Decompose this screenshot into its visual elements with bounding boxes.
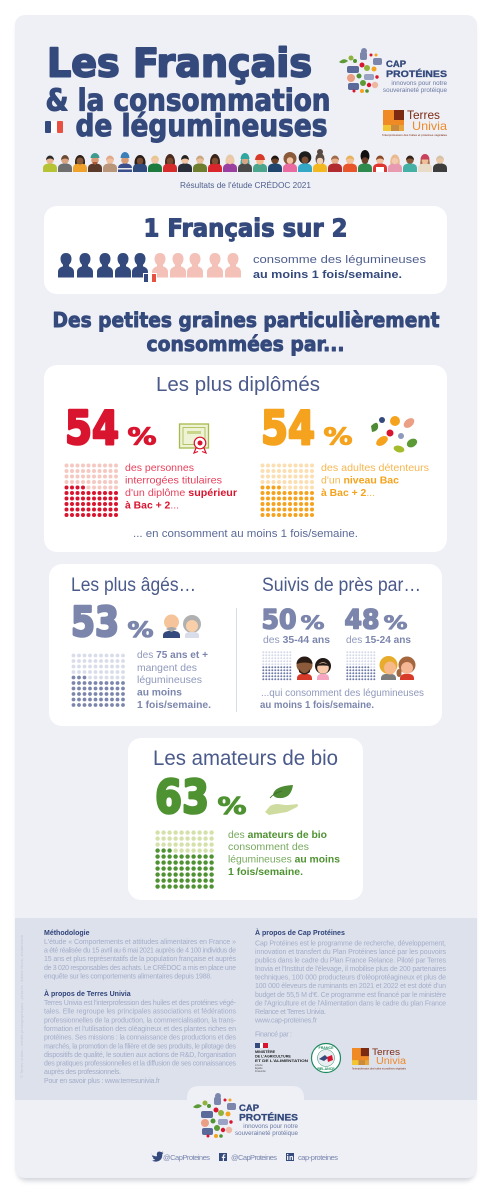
logo: ministère: Fraternité [255, 1070, 266, 1073]
text: 75 ans et +: des 75 ans et + [137, 649, 208, 661]
stat: 48%: 48 [344, 604, 380, 636]
text: 75 ans et + [137, 649, 211, 711]
stat: 54% orange: % [324, 424, 352, 450]
icon: LinkedIn [286, 1153, 294, 1161]
stat: 63%: % [218, 794, 246, 820]
logo: ministère [255, 1043, 308, 1073]
text: 75 ans et +: mangent des [137, 662, 197, 674]
footer tab [187, 1086, 304, 1100]
logo: Cap Protéines footer [193, 1093, 299, 1138]
text: À propos de Terres Univia: formation et l'utilisation des oléagineux et des plantes riches en [44, 1026, 236, 1033]
stat: 50%: % [300, 612, 324, 634]
icon: French flag [45, 121, 63, 133]
logo: Cap Protéines: PROTÉINES [386, 69, 447, 80]
text: À propos de Terres Univia: professionnelles de la production, la commercialisation, la trans- [44, 1017, 237, 1024]
heading: Des petites graines [52, 308, 440, 356]
footer band [15, 918, 477, 1100]
subtitle: source: Résultats de l'étude CRÉDOC 2021 [180, 181, 312, 190]
logo: Cap Protéines footer: innovons pour notre [243, 1123, 299, 1130]
logo: ministère: DE L'AGRICULTURE [255, 1054, 291, 1058]
text: Méthodologie: Méthodologie [44, 930, 90, 937]
logo: France Relance: RELANCE [317, 1067, 335, 1071]
text: weekly consumption: consomme des légumineuses [253, 254, 427, 266]
text: amateurs de bio: légumineuses au moins [228, 854, 340, 866]
text: À propos de Cap Protéines: Cap Protéines est le programme de recherche, développement, [255, 940, 446, 948]
dot chart: 54 red [64, 463, 119, 518]
stat: 54% orange: 54 [261, 401, 315, 455]
text: À propos de Cap Protéines: Relance et Terres Univia. [255, 1009, 326, 1016]
title [46, 42, 330, 144]
heading: Suivis de près: Suivis de près par… [262, 575, 421, 596]
text: À propos de Cap Protéines: techniques, 100 000 producteurs d'oléoprotéagineux et plus de [255, 975, 446, 982]
text: conclusion: ... en consomment au moins 1 fois/semaine. [133, 528, 358, 540]
social links: cap-proteines [298, 1153, 338, 1162]
icon: legumes [371, 416, 419, 454]
logo: Terres Univia: Terres [407, 110, 440, 122]
logo: Cap Protéines footer: PROTÉINES [239, 1112, 298, 1124]
text: À propos de Terres Univia: dispositifs de qualité, le soutien aux actions de R&D, l'organisation [44, 1052, 236, 1059]
title: Les Français [47, 42, 312, 86]
text: au moins 1 fois/semaine: ...qui consomment des légumineuses [261, 687, 424, 699]
text: À propos de Cap Protéines [254, 928, 446, 1038]
stat: 53% [71, 598, 154, 646]
logo: ministère: Liberté [255, 1064, 263, 1067]
text: 75 ans et +: 1 fois/semaine. [137, 699, 211, 711]
text: À propos de Terres Univia: Terres Univia est l'interprofession des huiles et des protéines végé- [44, 1000, 237, 1007]
stat: 50%: 50 [262, 604, 296, 636]
text: niveau Bac: des adultes détenteurs [321, 462, 429, 474]
logo: Terres Univia small: l'interprofession des huiles et protéines végétales [352, 1068, 407, 1070]
stat: 53%: % [128, 618, 154, 642]
text: au moins 1 fois/semaine: au moins 1 fois/semaine. [260, 699, 374, 711]
text: amateurs de bio [228, 829, 340, 878]
text: niveau Bac [321, 462, 429, 499]
icon: diploma [180, 424, 208, 453]
heading: Les plus diplômés [156, 374, 320, 396]
text: amateurs de bio: consomment des [228, 841, 309, 853]
text: À propos de Terres Univia: auprès des professionnels. [44, 1069, 121, 1076]
social links: @CapProteines [231, 1153, 277, 1162]
text: Méthodologie: 15 ans et plus représentatifs de la population française et auprès [44, 956, 236, 963]
logo: ministère: Égalité [255, 1067, 263, 1070]
icon: adults 35-44 [296, 657, 331, 680]
text: À propos de Cap Protéines: Financé par : [255, 1032, 292, 1038]
illustration: row of people [43, 149, 447, 172]
text: Méthodologie: L'étude « Comportements et attitudes alimentaires en France » [44, 939, 236, 946]
heading: Les amateurs de bio [153, 747, 338, 770]
icon: hand and leaf [265, 785, 298, 815]
text: diplôme supérieur: des personnes [125, 462, 194, 474]
panel: 1 Français sur 2 [44, 206, 447, 294]
stat: 48% [344, 604, 411, 646]
text: À propos de Terres Univia: tales. Elle regroupe les principales associations et fédérations [44, 1009, 236, 1016]
logo: Cap Protéines [339, 48, 447, 94]
text: À propos de Terres Univia: protéines. Ses missions : la connaissance des productions et des [44, 1035, 237, 1042]
text: À propos de Cap Protéines: budget de 55,5 M d'€. Ce programme est financé par le ministère [255, 992, 446, 999]
stat: 50%: des 35-44 ans [263, 635, 330, 646]
logo: ministère: ET DE L'ALIMENTATION [255, 1059, 308, 1063]
text: niveau Bac: à Bac + 2... [321, 487, 375, 499]
text: amateurs de bio: 1 fois/semaine. [228, 866, 303, 878]
stat: 54% red: 54 [65, 401, 119, 455]
logo: Terres Univia [382, 110, 448, 137]
icon: Facebook [219, 1153, 227, 1161]
stat: 53%: 53 [71, 598, 119, 646]
heading: Des petites graines: Des petites graines particulièrement [52, 308, 440, 332]
text: À propos de Terres Univia: Pour en savoir plus : www.terresunivia.fr [44, 1078, 161, 1085]
dot chart: 48 [346, 651, 376, 681]
social links: @CapProteines [163, 1153, 210, 1162]
text: Méthodologie [44, 930, 236, 980]
stat: 54% orange [261, 401, 352, 455]
text: diplôme supérieur: d'un diplôme supérieur [125, 487, 237, 499]
logo: Cap Protéines: innovons pour notre [391, 80, 447, 87]
text: À propos de Cap Protéines: 100 000 éleveurs de ruminants en 2021 et 2022 et est doté d'un [255, 983, 446, 990]
stat: 54% red: % [128, 424, 156, 450]
icon row: people silhouettes [58, 253, 241, 283]
panel: age groups [49, 564, 442, 726]
text: À propos de Terres Univia [44, 989, 237, 1085]
text: Méthodologie: enquête sur les comportements alimentaires depuis 1988. [44, 974, 212, 980]
text: À propos de Cap Protéines: publics dans le cadre du Plan France Relance. Piloté par Terres [255, 958, 446, 965]
stat: 63% [155, 770, 246, 824]
stat: 48%: % [384, 612, 408, 634]
text: diplôme supérieur: à Bac + 2... [125, 500, 179, 512]
text: weekly consumption [253, 254, 427, 281]
logo: Terres Univia small: Terres [372, 1047, 400, 1058]
icon: young adults 15-24 [380, 656, 416, 680]
panel: Les plus diplômés [44, 365, 447, 552]
heading: Des petites graines: consommées par... [146, 332, 344, 356]
logo: France Relance: FRANCE [319, 1046, 334, 1050]
dot chart: 53 [71, 653, 126, 708]
text: À propos de Cap Protéines: www.cap-proteines.fr [254, 1018, 318, 1024]
title: de légumineuses [76, 109, 328, 144]
text: Méthodologie: de 3 020 responsables des achats. Le CRÉDOC a mis en place une [44, 963, 236, 972]
logo: Terres Univia small: Univia [376, 1056, 406, 1067]
text: À propos de Cap Protéines: Inovia et l'Institut de l'élevage, il mobilise plus de 200 partenaires [255, 966, 446, 973]
text: weekly consumption: au moins 1 fois/semaine. [253, 269, 402, 281]
text: au moins 1 fois/semaine [260, 687, 424, 711]
logo: Cap Protéines footer: CAP [239, 1103, 260, 1114]
text: Méthodologie: a été réalisée du 15 avril au 6 mai 2021 auprès de 4 100 individus de [44, 948, 236, 955]
logo: Cap Protéines: CAP [386, 59, 407, 70]
text: 75 ans et +: légumineuses [137, 674, 202, 686]
stat: 50% [262, 604, 330, 646]
text: 75 ans et +: au moins [137, 686, 182, 698]
dot chart: 63 [155, 830, 215, 890]
logo: France Relance [312, 1044, 340, 1072]
text: amateurs de bio: des amateurs de bio [228, 829, 327, 841]
icon: Twitter [152, 1152, 164, 1162]
text: À propos de Cap Protéines: À propos de Cap Protéines [255, 928, 345, 937]
logo: Cap Protéines: souveraineté protéique [383, 87, 447, 94]
dot chart: 50 [262, 651, 292, 681]
text: niveau Bac: d'un niveau Bac [321, 474, 399, 486]
heading: Les plus âgés: Les plus âgés… [71, 575, 196, 596]
logo: Terres Univia small [352, 1047, 407, 1070]
dot chart: 54 orange [260, 463, 315, 518]
heading: 1 Français sur 2: 1 Français sur 2 [144, 214, 348, 242]
text: À propos de Cap Protéines: de l'Agriculture et de l'Alimentation dans le cadre du plan France [255, 1000, 446, 1007]
text: À propos de Terres Univia: des pratiques professionnelles et la diffusion de ses connaissances [44, 1061, 237, 1068]
social links [152, 1152, 338, 1162]
logo: Cap Protéines footer: souveraineté protéique [235, 1130, 299, 1137]
logo: Terres Univia: l'interprofession des huiles et protéines végétales [382, 133, 448, 137]
text: diplôme supérieur [125, 462, 237, 512]
text: diplôme supérieur: interrogées titulaires [125, 474, 222, 486]
stat: 54% red [65, 401, 156, 455]
panel: Les amateurs de bio [128, 738, 363, 900]
text: À propos de Terres Univia: À propos de Terres Univia [44, 989, 131, 998]
text: À propos de Terres Univia: marchés, la promotion de la filière et de ses produits, le pilotage des [44, 1043, 236, 1050]
logo: ministère: MINISTÈRE [255, 1049, 276, 1054]
title: & la consommation [46, 84, 330, 118]
stat: 48%: des 15-24 ans [346, 635, 411, 646]
logo: Terres Univia: Univia [412, 119, 447, 133]
vertical credit: © Terres Univia – crédits photographiques : pictures : Adobe Stock, shutterstock [20, 935, 24, 1078]
icon: seniors [163, 614, 201, 638]
stat: 63%: 63 [155, 770, 209, 824]
text: À propos de Cap Protéines: innovation et transfert du Plan Protéines lancé par les pouvoirs [255, 949, 446, 956]
